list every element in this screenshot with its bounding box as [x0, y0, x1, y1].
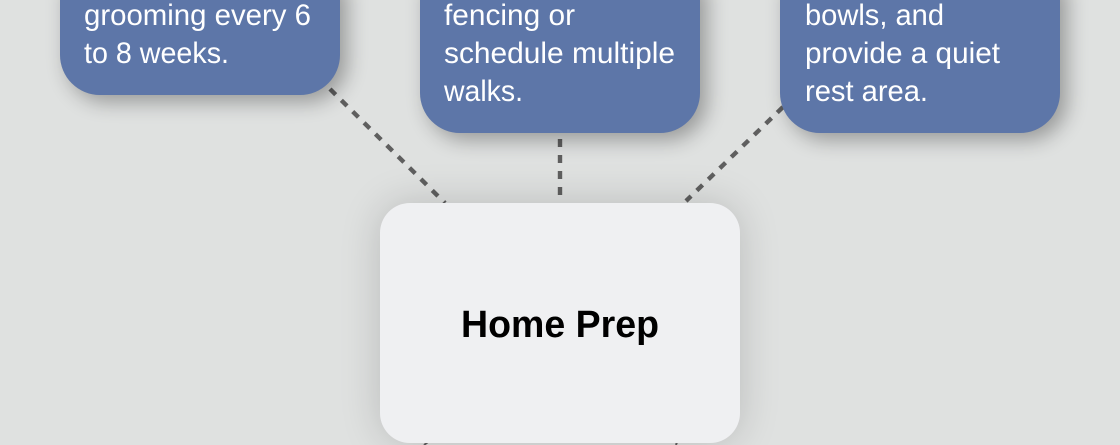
card text: exercise: schedule multiple [444, 37, 675, 70]
connector: grooming card to Home Prep [330, 89, 445, 203]
panel: Home Prep center box [380, 203, 740, 443]
panel: grooming card [60, 0, 340, 95]
card text: exercise [443, 0, 675, 108]
connector: exercise card to Home Prep [558, 139, 562, 197]
panel: exercise card [420, 0, 700, 133]
panel: rest area card [780, 0, 1060, 133]
card text: rest area: rest area. [805, 75, 928, 108]
card text: rest area: provide a quiet [805, 37, 1001, 70]
card text: exercise: walks. [443, 75, 523, 108]
card text: rest area [805, 0, 1001, 108]
heading: Home Prep: Home Prep [461, 304, 659, 346]
card text: grooming [84, 0, 311, 70]
card text: grooming: to 8 weeks. [84, 37, 229, 70]
connector: rest area card to Home Prep [686, 107, 783, 201]
